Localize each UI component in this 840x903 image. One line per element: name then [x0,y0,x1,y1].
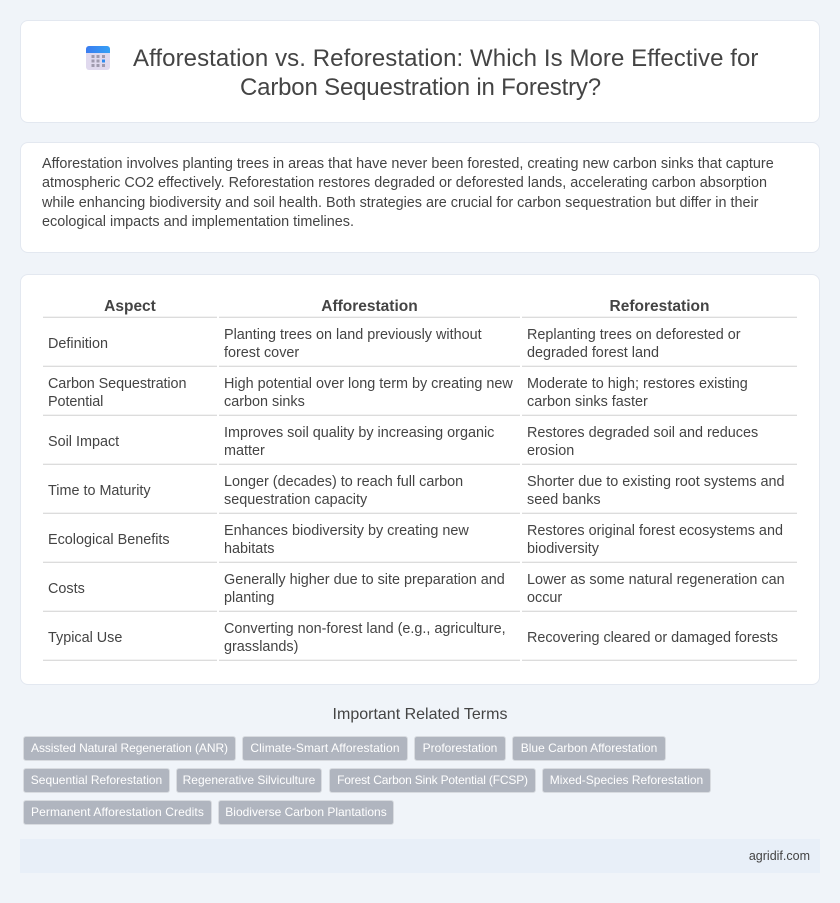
row: ecological benefits [43,523,797,563]
row: time to maturity: Time to Maturity [48,483,151,499]
row: soil impact: matter [224,443,265,459]
panel: intro text [20,142,820,253]
related terms tags: Proforestation [423,741,497,755]
row: definition: Planting trees on land previously without [224,327,482,343]
row: ecological benefits: Ecological Benefits [48,532,170,548]
table header: Afforestation [321,298,418,315]
row: costs: Lower as some natural regeneration can [527,572,785,588]
heading: important related terms: Important Related Terms [333,706,507,723]
table header [43,298,797,318]
title: Carbon Sequestration in Forestry? [240,74,601,101]
row: definition: Replanting trees on deforested or [527,327,741,343]
row: soil impact [43,425,797,465]
row: ecological benefits: biodiversity [527,541,599,557]
row: time to maturity: Shorter due to existing root systems and [527,474,785,490]
title: Afforestation vs. Reforestation: Which Is More Effective for [133,45,759,72]
intro paragraph: Afforestation involves planting trees in areas that have never been forested, creating new carbon sinks that capture [42,156,774,172]
row: soil impact: Soil Impact [48,434,119,450]
intro paragraph [42,156,774,230]
row: soil impact: erosion [527,443,574,459]
row: carbon sequestration potential: High potential over long term by creating new [224,376,513,392]
row: ecological benefits: Enhances biodiversity by creating new [224,523,469,539]
row: typical use: Typical Use [48,630,122,646]
title [133,45,759,101]
row: soil impact: Restores degraded soil and reduces [527,425,758,441]
intro paragraph: atmospheric CO2 effectively. Reforestation restores degraded or deforested lands, accelerating carbon absorption [42,175,767,191]
related terms tags: Regenerative Silviculture [183,773,315,787]
row: ecological benefits: Restores original forest ecosystems and [527,523,783,539]
table header: Reforestation [610,298,709,315]
row: ecological benefits: habitats [224,541,274,557]
row: carbon sequestration potential: Carbon Sequestration [48,376,186,392]
row: costs: Costs [48,581,85,597]
related terms tags: Forest Carbon Sink Potential (FCSP) [337,773,528,787]
row: costs: Generally higher due to site preparation and [224,572,505,588]
row: soil impact: Improves soil quality by increasing organic [224,425,494,441]
row: carbon sequestration potential [43,376,797,416]
related terms tags: Biodiverse Carbon Plantations [225,805,387,819]
icon: calendar [86,46,110,70]
row: time to maturity: Longer (decades) to reach full carbon [224,474,463,490]
panel: comparison table [20,274,820,685]
row: carbon sequestration potential: carbon sinks faster [527,394,648,410]
row: typical use: Converting non-forest land (e.g., agriculture, [224,621,506,637]
related terms tags: Sequential Reforestation [31,773,162,787]
row: carbon sequestration potential: Potential [48,394,103,410]
row: costs: planting [224,590,274,606]
row: typical use: grasslands) [224,639,298,655]
row: costs: occur [527,590,562,606]
row: time to maturity: sequestration capacity [224,492,367,508]
related terms tags: Assisted Natural Regeneration (ANR) [31,741,228,755]
footer [20,839,820,873]
related terms tags: Climate-Smart Afforestation [250,741,400,755]
row: typical use [43,621,797,661]
related terms tags: Blue Carbon Afforestation [521,741,657,755]
row: carbon sequestration potential: Moderate to high; restores existing [527,376,748,392]
related terms tags: Permanent Afforestation Credits [31,805,204,819]
row: definition: degraded forest land [527,345,659,361]
related terms tags [23,736,711,825]
related terms tags: Mixed-Species Reforestation [550,773,703,787]
row: time to maturity: seed banks [527,492,601,508]
intro paragraph: while enhancing biodiversity and soil health. Both strategies are crucial for carbon sequestration but differ in their [42,194,758,210]
row: carbon sequestration potential: carbon sinks [224,394,305,410]
row: typical use: Recovering cleared or damaged forests [527,630,778,646]
table header: Aspect [104,298,156,315]
row: definition: Definition [48,336,108,352]
title card [20,20,820,123]
row: definition [43,327,797,367]
intro paragraph: ecological impacts and implementation timelines. [42,214,354,230]
row: costs [43,572,797,612]
row: definition: forest cover [224,345,299,361]
footer: agridif.com [749,849,810,863]
row: time to maturity [43,474,797,514]
